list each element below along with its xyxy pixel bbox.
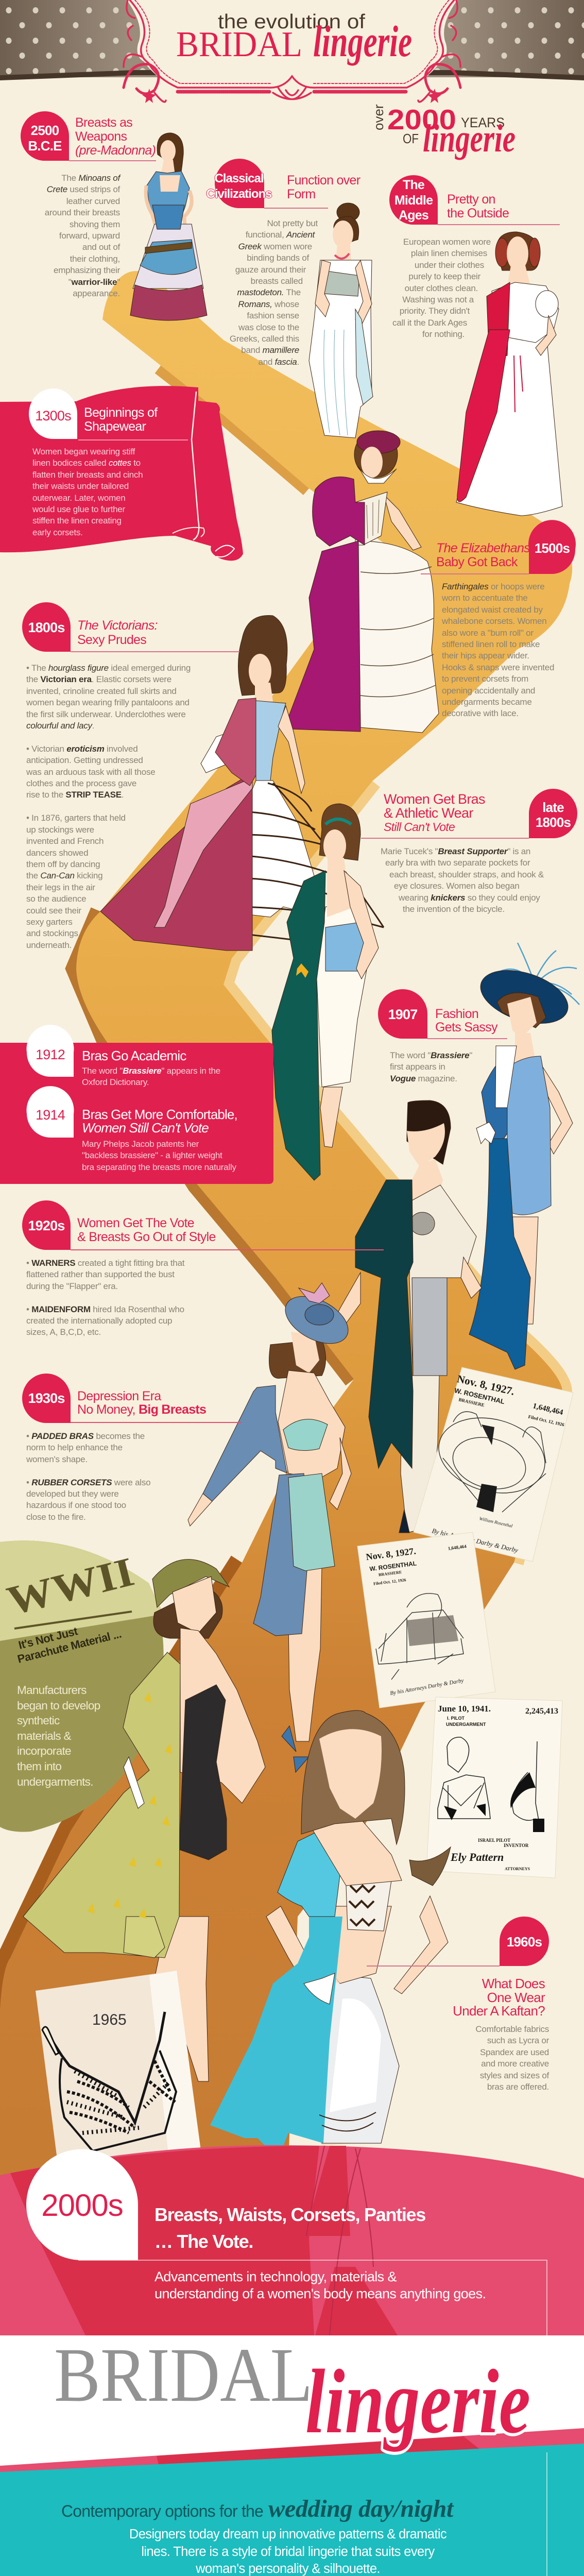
text: minoans: appearance. [73, 289, 120, 298]
tagline: over 2000 years of lingerie [371, 104, 516, 160]
text: synthetic materials: materials & [17, 1730, 71, 1742]
text: advancements: Advancements in technology, materials & [154, 2269, 397, 2284]
date badge: 1930s [22, 1374, 242, 1423]
patent document 1941: INVENTOR [504, 1843, 529, 1848]
patent document 1941: ATTORNEYS [505, 1867, 530, 1871]
patent document 1927 A: W. ROSENTHAL [454, 1386, 505, 1405]
text: victorian era: them off by dancing [26, 859, 100, 869]
text: minoans: shoving them [70, 219, 120, 229]
badge text: 2500 BCE: B.C.E [28, 138, 62, 154]
badge text: the middle ages: Ages [399, 208, 428, 223]
patent document 1927 A: 1,648,464 [532, 1402, 564, 1417]
patent document 1927 B: Nov. 8, 1927. [365, 1546, 417, 1562]
date badge: 1800s [22, 602, 239, 652]
badge text: 1914: 1914 [36, 1107, 65, 1123]
date badge: middle ages [389, 175, 560, 225]
text: vogue: Vogue magazine. [390, 1074, 457, 1083]
text: padded bras and rubber corsets: developed but they were [26, 1489, 118, 1499]
heading: what does one wear under a kaftan: Under A Kaftan? [453, 2003, 545, 2019]
card: 1965 bra: 1965 [92, 2011, 127, 2028]
text: synthetic materials: synthetic [17, 1714, 60, 1727]
heading: contemporary options: Contemporary options for the wedding day/night [61, 2495, 453, 2522]
ornamental title frame: the evolution of [218, 11, 365, 33]
figure: Greek woman [309, 203, 373, 438]
text: cottes: linen bodices called cottes to [32, 458, 141, 468]
text: breast supporter: the invention of the bicycle. [403, 904, 505, 914]
golden timeline ribbon [0, 271, 572, 2184]
badge text: classical civilizations [206, 172, 272, 201]
heading: women get the vote: & Breasts Go Out of Style [77, 1230, 216, 1244]
text: victorian era: the Victorian era. Elastic corsets were [26, 674, 171, 684]
text: warners and maidenform: created the internationally adopted cup [26, 1316, 172, 1326]
badge text: the middle ages: The [403, 178, 424, 192]
panel: teal section background [0, 2444, 584, 2576]
text: warners and maidenform: sizes, A, B,C,D, etc. [26, 1327, 101, 1337]
text: farthingales: stiffened linen roll to make [442, 639, 540, 649]
header: brown polka-dot band [0, 0, 584, 80]
text: synthetic materials: undergarments. [17, 1775, 93, 1788]
badge text: 1912: 1912 [36, 1047, 65, 1062]
figure: 1930s woman in blue [188, 1283, 356, 1772]
patent document 1941: I. PILOT [447, 1716, 465, 1721]
badge text: 1920s: 1920s [28, 1218, 65, 1233]
text: medieval chemises: for nothing. [422, 329, 465, 339]
panel: WWII note: It's Not Just [17, 1624, 79, 1652]
text: victorian era: sexy garters [26, 917, 73, 927]
text: warners and maidenform [26, 1258, 184, 1337]
text: oxford dictionary: The word "Brassiere" appears in the [82, 1066, 220, 1076]
badge text: 1930s: 1930s [28, 1391, 65, 1406]
text: greek and roman: gauze around their [235, 265, 306, 275]
text: victorian era: the first silk underwear. Underclothes were [26, 709, 186, 719]
heading: women get bras: Still Can't Vote [384, 820, 455, 834]
text: minoans [45, 173, 121, 298]
card: 1965 bra [36, 1971, 203, 2179]
text: oxford dictionary [82, 1066, 220, 1087]
heading: breasts as weapons: Breasts as [75, 115, 132, 130]
text: victorian era [26, 663, 191, 950]
text: cottes: their waists under tailored [32, 481, 129, 491]
text: lycra: such as Lycra or [487, 2036, 549, 2045]
text: victorian era: could see their [26, 906, 81, 916]
text: oxford dictionary: Oxford Dictionary. [82, 1077, 149, 1087]
panel: white bridal lingerie heading area [0, 2335, 584, 2499]
heading: pretty on the outside [447, 192, 509, 221]
text: victorian era: underneath. [26, 940, 72, 950]
heading: bridal lingerie big wordmark: BRIDAL [54, 2332, 313, 2418]
text: warners and maidenform: • MAIDENFORM hired Ida Rosenthal who [26, 1304, 184, 1314]
text: padded bras and rubber corsets: • RUBBER CORSETS were also [26, 1478, 150, 1487]
text: greek and roman: band mamillere [241, 345, 299, 355]
text: victorian era: the Can-Can kicking [26, 871, 102, 880]
ornamental title frame [124, 0, 460, 103]
text: padded bras and rubber corsets: • PADDED BRAS becomes the [26, 1431, 145, 1441]
badge text: 2000s: 2000s [41, 2188, 123, 2223]
date badge: late 1800s [361, 789, 577, 838]
text: lycra: Spandex are used [480, 2047, 549, 2057]
text: greek and roman: fashion sense [247, 311, 299, 320]
figure: 1907 woman in feathered hat [469, 943, 579, 1369]
text: medieval chemises: call it the Dark Ages [392, 318, 467, 328]
text: victorian era: up stockings were [26, 825, 94, 835]
text: vogue: The word "Brassiere" [390, 1050, 472, 1060]
text: greek and roman: and fascia. [259, 357, 299, 367]
text: farthingales: undergarments became [442, 697, 532, 707]
badge text: 1800s: 1800s [28, 620, 65, 635]
tagline: over 2000 years of lingerie: over [371, 104, 386, 130]
text: minoans: Crete used strips of [47, 184, 120, 194]
text: warners and maidenform: during the "Flapper" era. [26, 1281, 118, 1291]
text: cottes: stiffen the linen creating [32, 516, 122, 526]
text: lycra: and more creative [481, 2059, 549, 2069]
badge text: the middle ages [394, 178, 433, 223]
patent document 1927 B: BRASSIERE [379, 1570, 402, 1577]
badge text: late 1800s: 1800s [536, 815, 571, 830]
text: warners and maidenform: • WARNERS created a tight fitting bra that [26, 1258, 184, 1268]
patent document 1941: Ely Pattern [450, 1851, 504, 1863]
text: medieval chemises: priority. They didn't [400, 306, 470, 316]
heading: the victorians: The Victorians: [77, 618, 158, 633]
text: victorian era: • The hourglass figure ideal emerged during [26, 663, 191, 673]
text: victorian era: anticipation. Getting undressed [26, 755, 143, 765]
patent document 1941: ISRAEL PILOT [478, 1838, 510, 1843]
text: backless brassiere: Mary Phelps Jacob patents her [82, 1139, 199, 1149]
badge text: 2500 BCE: 2500 [31, 123, 59, 138]
text: synthetic materials: Manufacturers [17, 1684, 87, 1697]
text: synthetic materials: incorporate [17, 1744, 71, 1757]
text: lycra [475, 2024, 549, 2092]
text: breast supporter: each breast, shoulder straps, and hook & [389, 870, 544, 879]
text: padded bras and rubber corsets: close to the fire. [26, 1512, 86, 1522]
patent document 1927 A: BRASSIERE [458, 1397, 485, 1408]
text: cottes [32, 447, 143, 537]
tagline: over 2000 years of lingerie: YEARS [461, 115, 505, 130]
figure: late 1800s woman in teal [272, 804, 379, 1180]
heading: women get bras [384, 791, 485, 834]
heading: what does one wear under a kaftan: One Wear [487, 1990, 545, 2005]
heading: women get the vote [77, 1216, 216, 1244]
text: backless brassiere: bra separating the breasts more naturally [82, 1162, 236, 1172]
heading: function over form: Form [287, 187, 316, 201]
text: greek and roman [230, 218, 318, 367]
text: greek and roman: breasts called [251, 276, 303, 286]
figure: Victorian woman with crinoline [100, 616, 384, 951]
text: medieval chemises [392, 237, 491, 339]
text: medieval chemises: under their clothes [415, 260, 484, 270]
heading: the victorians [77, 618, 158, 647]
text: advancements: understanding of a women's body means anything goes. [154, 2286, 486, 2301]
badge text: late 1800s [536, 800, 571, 830]
text: warners and maidenform: flattened rather than supported the bust [26, 1269, 175, 1279]
text: designers today: woman's personality & silhouette. [196, 2562, 380, 2576]
text: breast supporter: eye closures. Women also began [394, 881, 520, 891]
scroll banner: 1300s [0, 386, 243, 561]
heading: what does one wear under a kaftan [453, 1976, 545, 2019]
badge text: classical civilizations: Classical [214, 172, 264, 185]
badge text: classical civilizations: Civilizations [206, 187, 272, 201]
figure: medieval woman [456, 232, 562, 516]
heading: the elizabethans: The Elizabethans: [436, 541, 533, 555]
tagline: over 2000 years of lingerie: 2000 [387, 104, 456, 135]
text: greek and roman: Greek women wore [238, 242, 312, 251]
text: farthingales: elongated waist created by [442, 605, 543, 615]
text: designers today: Designers today dream up innovative patterns & dramatic [129, 2527, 446, 2541]
heading: pretty on the outside: Pretty on [447, 192, 495, 207]
text: victorian era: so the audience [26, 894, 86, 904]
panel: WWII note: WWII [3, 1549, 139, 1624]
text: farthingales: decorative with lace. [442, 708, 519, 718]
text: advancements [154, 2269, 486, 2301]
text: minoans: emphasizing their [54, 265, 120, 275]
patent document 1927 A: William Rosenthal [479, 1516, 513, 1529]
patent document 1927 B: Filed Oct. 12, 1926 [373, 1578, 406, 1586]
text: vogue: first appears in [390, 1062, 445, 1072]
ornamental title frame: lingerie [313, 16, 412, 66]
text: designers today: lines. There is a style of bridal lingerie that suits every [141, 2544, 435, 2558]
heading: women get the vote: Women Get The Vote [77, 1216, 194, 1230]
text: minoans: and out of [82, 242, 120, 252]
text: minoans: The Minoans of [61, 173, 120, 183]
text: minoans: their clothing, [70, 254, 120, 264]
badge text: 2500 BCE [28, 123, 62, 154]
heading: the elizabethans [436, 541, 533, 569]
heading: breasts as weapons [75, 115, 156, 158]
patent document 1927 A: By his Attorneys Darby & Darby [431, 1527, 519, 1554]
heading: women get bras: Women Get Bras [384, 791, 485, 807]
text: medieval chemises: European women wore [403, 237, 491, 247]
text: padded bras and rubber corsets: women's shape. [26, 1454, 88, 1464]
panel: 1912 and 1914 [0, 1025, 273, 1184]
text: medieval chemises: Washing was not a [402, 295, 474, 304]
heading: breasts waists corsets panties the vote: Breasts, Waists, Corsets, Panties [154, 2204, 425, 2225]
heading: breasts as weapons: (pre-Madonna) [75, 143, 156, 158]
text: padded bras and rubber corsets: norm to help enhance the [26, 1443, 123, 1452]
text: lycra: bras are offered. [487, 2082, 549, 2092]
text: cottes: flatten their breasts and cinch [32, 470, 143, 480]
badge text: 1500s: 1500s [535, 540, 570, 556]
date badge: 1500s [421, 520, 576, 574]
date badge: 2500 BCE [21, 111, 156, 161]
heading: beginnings of shapewear: Beginnings of [84, 405, 157, 420]
text: victorian era: colourful and lacy. [26, 721, 94, 731]
panel: 2000s band [0, 2145, 584, 2576]
heading: breasts waists corsets panties the vote: … The Vote. [154, 2231, 253, 2252]
text: breast supporter: early bra with two separate pockets for [385, 858, 530, 868]
text: minoans: "warrior-like" [68, 277, 120, 287]
text: victorian era: their legs in the air [26, 883, 95, 892]
text: cottes: would use glue to further [32, 504, 125, 514]
text: victorian era: clothes and the process gave [26, 778, 136, 788]
heading: bras get more comfortable: Bras Get More Comfortable, [82, 1107, 237, 1122]
text: greek and roman: Not pretty but [267, 218, 318, 228]
heading: fashion gets sassy: Fashion [435, 1007, 478, 1021]
patent document 1941: UNDERGARMENT [446, 1722, 486, 1727]
text: farthingales: opening accidentally and [442, 686, 535, 696]
patent document 1941: June 10, 1941. [438, 1704, 491, 1714]
text: farthingales: Hooks & snaps were invented [442, 663, 554, 672]
text: lycra: styles and sizes of [480, 2071, 549, 2080]
heading: depression era: No Money, Big Breasts [77, 1402, 206, 1417]
heading: the victorians: Sexy Prudes [77, 633, 146, 647]
figure: Elizabethan woman with hoop skirt [287, 431, 439, 733]
text: victorian era: invented and French [26, 836, 104, 846]
text: padded bras and rubber corsets [26, 1431, 150, 1522]
text: greek and roman: mastodeton. The [237, 287, 301, 297]
text: padded bras and rubber corsets: hazardous if one stood too [26, 1500, 126, 1510]
text: synthetic materials: began to develop [17, 1699, 100, 1712]
heading: the elizabethans: Baby Got Back [436, 555, 518, 569]
text: victorian era: dancers showed [26, 848, 88, 857]
heading: bras get more comfortable [82, 1107, 237, 1136]
heading: function over form [287, 173, 360, 201]
text: farthingales [442, 582, 554, 718]
text: minoans: leather curved [66, 196, 120, 206]
heading: breasts as weapons: Weapons [75, 129, 127, 144]
heading: women get bras: & Athletic Wear [384, 805, 473, 820]
date badge: classical [215, 159, 328, 208]
text: cottes: Women began wearing stiff [32, 447, 135, 456]
text: medieval chemises: purely to keep their [408, 272, 480, 281]
patent document 1927 B: By his Attorneys Darby & Darby [389, 1677, 464, 1697]
text: greek and roman: Romans, whose [238, 299, 299, 309]
text: designers today [129, 2527, 446, 2576]
figure: 1920s flapper [330, 1100, 482, 1533]
text: backless brassiere: "backless brassiere" - a lighter weight [82, 1150, 222, 1160]
text: breast supporter: Marie Tucek's "Breast Supporter" is an [381, 846, 530, 856]
ornamental title frame: BRIDAL [176, 25, 302, 64]
text: synthetic materials: them into [17, 1760, 61, 1773]
figure: WWII-era woman [23, 1560, 265, 2081]
patent document 1941 [426, 1697, 562, 1878]
heading: breasts waists corsets panties the vote [154, 2204, 425, 2252]
badge text: 1300s: 1300s [35, 408, 71, 423]
text: victorian era: was an arduous task with all those [26, 767, 155, 777]
heading: pretty on the outside: the Outside [447, 206, 509, 221]
heading: bridal lingerie big wordmark [54, 2332, 530, 2452]
heading: depression era [77, 1389, 206, 1417]
patent document 1927 A: Filed Oct. 12, 1926 [528, 1414, 565, 1428]
text: lycra: Comfortable fabrics [475, 2024, 549, 2034]
text: synthetic materials [17, 1684, 100, 1788]
date badge: 1920s [22, 1200, 384, 1250]
text: farthingales: to prevent corsets from [442, 674, 528, 684]
heading: what does one wear under a kaftan: What Does [482, 1976, 545, 1991]
heading: fashion gets sassy: Gets Sassy [435, 1020, 497, 1035]
heading: depression era: Depression Era [77, 1389, 161, 1403]
heading: bras go academic: Bras Go Academic [82, 1048, 186, 1063]
text: victorian era: • In 1876, garters that held [26, 813, 126, 823]
text: greek and roman: functional, Ancient [246, 230, 315, 240]
text: medieval chemises: plain linen chemises [411, 248, 487, 258]
tagline: over 2000 years of lingerie: OF [403, 131, 419, 146]
figure: Minoan woman [130, 133, 207, 320]
badge text: late 1800s: late [542, 800, 564, 815]
panel: WWII note [0, 1540, 164, 1832]
patent document 1927 B [357, 1532, 495, 1708]
text: farthingales: also wore a "bum roll" or [442, 628, 534, 638]
text: greek and roman: Greeks, called this [230, 334, 299, 344]
patent document 1927 A [414, 1367, 573, 1562]
text: farthingales: their hips appear wider. [442, 651, 529, 660]
text: victorian era: women began wearing frilly pantaloons and [26, 698, 190, 707]
text: cottes: outerwear. Later, women [32, 493, 125, 503]
text: breast supporter: wearing knickers so they could enjoy [399, 893, 540, 903]
heading: beginnings of shapewear [84, 405, 158, 434]
text: minoans: around their breasts [45, 208, 120, 217]
text: victorian era: invented, crinoline created full skirts and [26, 686, 177, 696]
text: vogue [390, 1050, 472, 1083]
text: greek and roman: was close to the [238, 323, 299, 332]
text: medieval chemises: outer clothes clean. [405, 283, 478, 293]
heading: fashion gets sassy [435, 1007, 497, 1035]
heading: function over form: Function over [287, 173, 360, 188]
text: breast supporter [381, 846, 544, 914]
figure: 1960s woman with aqua kaftan [210, 1710, 451, 2159]
text: minoans: forward, upward [59, 231, 120, 241]
text: farthingales: whalebone corsets. Women [442, 616, 546, 626]
date badge: 1960s [367, 1917, 549, 1966]
panel: WWII note: Parachute Material ... [16, 1628, 123, 1666]
tagline: over 2000 years of lingerie: lingerie [423, 117, 516, 160]
date badge: 1907 [378, 989, 507, 1039]
text: victorian era: • Victorian eroticism involved [26, 744, 138, 754]
text: victorian era: and stockings [26, 928, 78, 938]
text: farthingales: worn to accentuate the [442, 593, 528, 603]
patent document 1927 A: Nov. 8, 1927. [456, 1372, 516, 1398]
patent document 1941: 2,245,413 [525, 1707, 558, 1716]
badge text: 1960s: 1960s [507, 1934, 542, 1950]
heading: beginnings of shapewear: Shapewear [84, 419, 146, 434]
patent document 1927 B: 1,648,464 [448, 1544, 467, 1551]
heading: bras get more comfortable: Women Still Can't Vote [82, 1120, 209, 1136]
text: cottes: early corsets. [32, 528, 83, 537]
badge text: 1907: 1907 [388, 1007, 417, 1022]
text: farthingales: Farthingales or hoops were [442, 582, 545, 591]
text: backless brassiere [82, 1139, 236, 1172]
badge text: the middle ages: Middle [394, 193, 433, 208]
text: victorian era: rise to the STRIP TEASE. [26, 790, 124, 800]
text: greek and roman: binding bands of [247, 253, 309, 263]
patent document 1927 B: W. ROSENTHAL [369, 1560, 417, 1572]
